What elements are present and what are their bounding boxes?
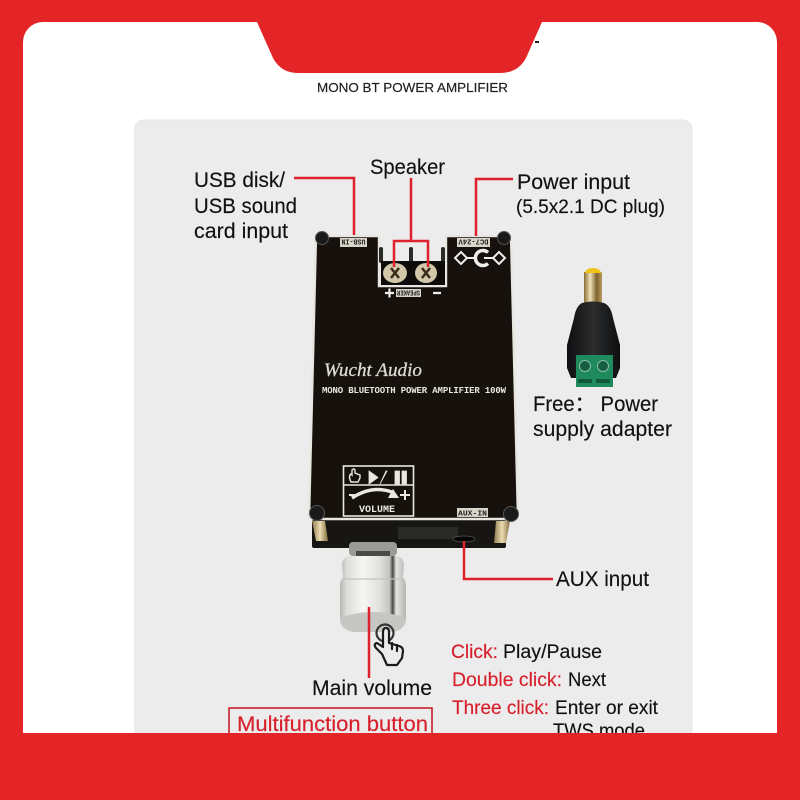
icon: pointing hand (375, 624, 403, 665)
button instructions: Enter or exit (555, 698, 659, 719)
callout: free adapter: supply adapter (533, 418, 672, 441)
button instructions (451, 642, 659, 742)
DC polarity symbol (455, 250, 505, 266)
volume knob (340, 542, 406, 632)
board model text: MONO BLUETOOTH POWER AMPLIFIER 100W (322, 386, 507, 396)
panel: diagram background (135, 120, 692, 780)
control icon box (344, 466, 414, 516)
USB-IN label: USB-IN (342, 236, 366, 244)
callout: USB input: card input (194, 220, 288, 243)
AUX-IN label (457, 508, 488, 518)
callout: main volume (312, 607, 432, 700)
callout: power input: (5.5x2.1 DC plug) (516, 197, 665, 218)
callout: speaker: Speaker (370, 156, 445, 179)
button instructions: Three click: (452, 698, 549, 719)
callout: free adapter: Free： Power (533, 393, 658, 416)
button instructions: Next (568, 670, 607, 691)
speaker polarity label (385, 288, 441, 298)
speaker polarity label: SPEAKER (396, 288, 420, 296)
standoffs (312, 521, 328, 541)
amplifier board (309, 232, 518, 548)
board brand: Wucht Audio (324, 360, 422, 381)
button instructions: Play/Pause (503, 642, 602, 663)
USB-IN label (340, 236, 367, 247)
button instructions: Click: (451, 642, 498, 663)
terminal block (379, 247, 445, 285)
callout: power input (476, 171, 665, 236)
callout: power input: Power input (517, 171, 630, 194)
subtitle: MONO BT POWER AMPLIFIER (317, 81, 508, 95)
PCB underside (312, 520, 506, 548)
callout: USB input: USB sound (194, 195, 297, 218)
multifunction button label (229, 708, 432, 748)
AUX-IN label: AUX-IN (458, 510, 487, 518)
title tab (257, 22, 542, 73)
control icon box: VOLUME (359, 505, 395, 516)
board plate (309, 236, 518, 519)
button instructions: Double click: (452, 670, 562, 691)
callout: AUX input: AUX input (556, 568, 649, 591)
bottom red band (0, 733, 800, 800)
stray mark (535, 41, 539, 43)
corner screws (310, 232, 518, 522)
callout: USB input (194, 169, 354, 243)
button instructions: TWS mode (553, 721, 645, 742)
callout: AUX input (464, 541, 649, 591)
callout: main volume: Main volume (312, 677, 432, 700)
DC label: DC7-24V (458, 236, 488, 244)
callout: speaker (370, 156, 445, 267)
multifunction button label: Multifunction button (237, 713, 428, 736)
callout: USB input: USB disk/ (194, 169, 285, 192)
callout: free adapter (533, 393, 672, 441)
power supply adapter image (567, 268, 620, 387)
